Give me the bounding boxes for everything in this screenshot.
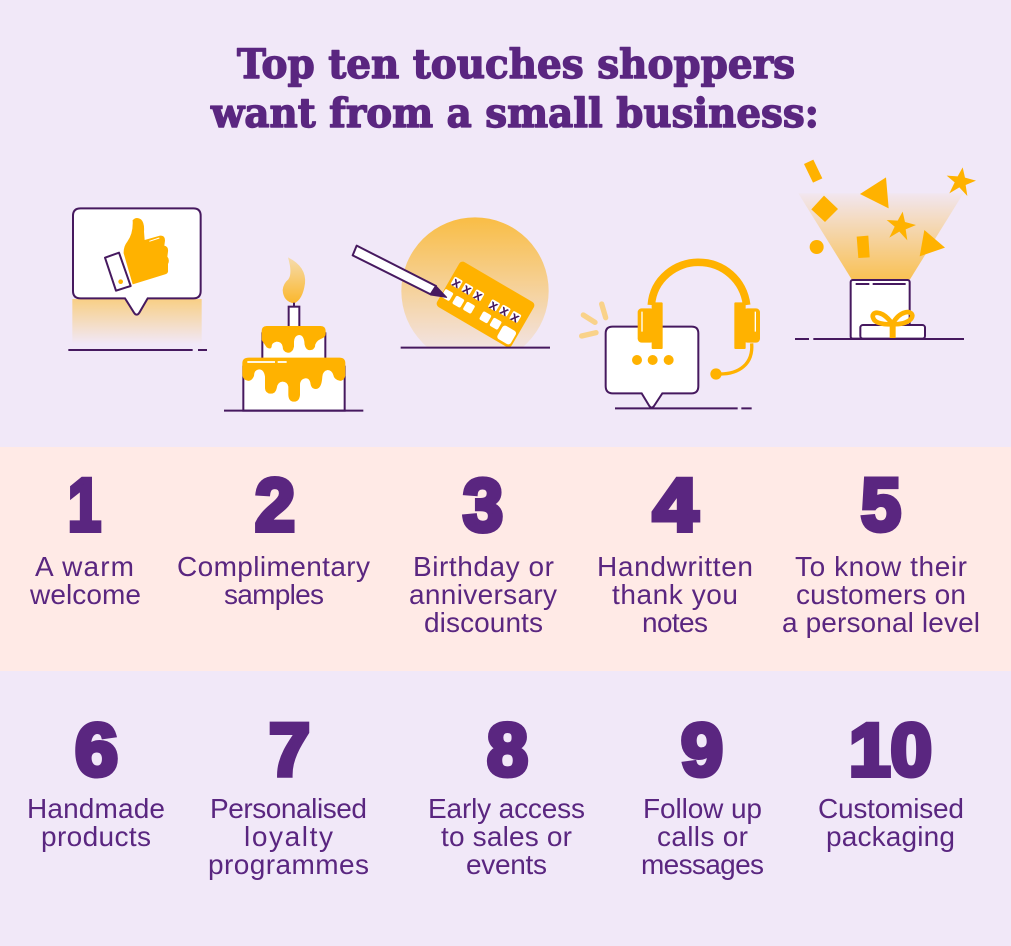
item 5: 5 <box>861 464 901 546</box>
item 3: anniversary <box>409 579 557 610</box>
item 3: 3 <box>463 464 503 546</box>
item 1 <box>29 464 141 610</box>
item 7: Personalised <box>210 793 367 824</box>
item 7: programmes <box>208 849 369 880</box>
item 10: 10 <box>849 708 932 792</box>
item 1: A warm <box>35 551 134 582</box>
icon: loyalty card and pen: x <box>497 302 512 319</box>
item 7 <box>208 708 369 880</box>
item 9: messages <box>641 849 764 880</box>
item 1: welcome <box>29 579 141 610</box>
item 5: a personal level <box>782 607 980 638</box>
item 8: to sales or <box>441 821 572 852</box>
item 4: notes <box>642 607 708 638</box>
item 10 <box>818 708 964 852</box>
item 6: products <box>41 821 151 852</box>
item 2: samples <box>224 579 324 610</box>
item 6 <box>27 708 165 852</box>
item 9: calls or <box>657 821 748 852</box>
title: want from a small business: <box>210 90 819 137</box>
icon: headset and speech bubble <box>582 262 760 408</box>
item 10: Customised <box>818 793 964 824</box>
item 3: Birthday or <box>413 551 554 582</box>
item 9: Follow up <box>643 793 762 824</box>
item 8 <box>428 708 585 880</box>
item 8: events <box>466 849 547 880</box>
icon: loyalty card and pen: x <box>471 286 486 304</box>
item 2 <box>177 464 370 610</box>
item 6: 6 <box>75 708 118 792</box>
item 10: packaging <box>826 821 955 852</box>
item 2: Complimentary <box>177 551 370 582</box>
item 6: Handmade <box>27 793 165 824</box>
icon: loyalty card and pen: x <box>508 308 523 326</box>
title <box>210 41 819 137</box>
icon: gift box with confetti <box>795 160 976 339</box>
title: Top ten touches shoppers <box>237 41 795 88</box>
item 3 <box>409 464 557 638</box>
item 4 <box>597 464 753 638</box>
item 1: 1 <box>68 464 101 546</box>
item 5: customers on <box>796 579 966 610</box>
icon: loyalty card and pen: x <box>460 280 475 298</box>
item 7: loyalty <box>244 821 333 852</box>
item 3: discounts <box>424 607 543 638</box>
item 5: To know their <box>795 551 967 582</box>
item 9: 9 <box>681 708 723 792</box>
icon: thumbs up speech bubble <box>68 208 207 350</box>
icon: loyalty card and pen <box>353 217 550 365</box>
item 4: thank you <box>612 579 738 610</box>
item 5 <box>782 464 980 638</box>
peach band <box>0 447 1011 671</box>
item 8: Early access <box>428 793 585 824</box>
item 4: Handwritten <box>597 551 753 582</box>
icon: birthday cake <box>224 257 363 411</box>
item 2: 2 <box>255 464 295 546</box>
icon: loyalty card and pen: x <box>487 296 502 314</box>
item 7: 7 <box>269 708 310 792</box>
icon: loyalty card and pen: x <box>449 274 464 291</box>
item 9 <box>641 708 764 880</box>
item 4: 4 <box>653 464 698 546</box>
item 8: 8 <box>487 708 528 792</box>
